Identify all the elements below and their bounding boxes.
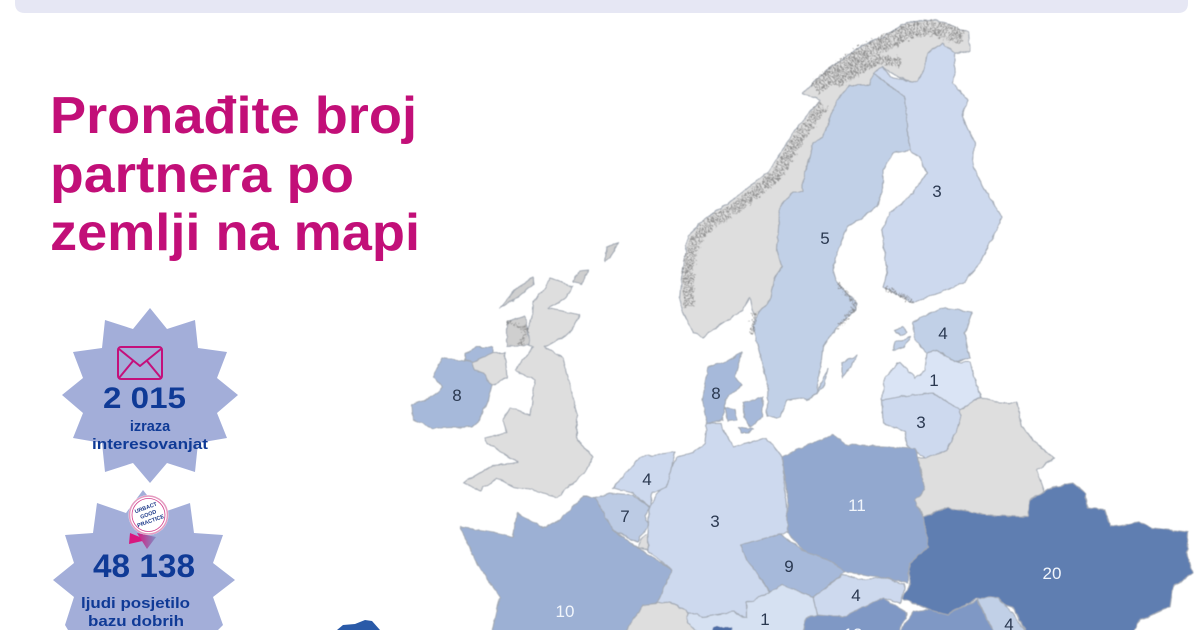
country: Belgium: [595, 493, 650, 542]
title: partnera po: [50, 146, 354, 204]
partner counts by country: 3: [710, 512, 720, 531]
icon: URBACT good practice seal: [128, 495, 168, 549]
partner counts by country: [452, 182, 1061, 630]
caption: ljudi posjetilo bazu dobrih: bazu dobrih: [88, 613, 184, 630]
islands: Baltic: [817, 327, 910, 393]
caption: izraza interesovanjat: [92, 419, 208, 453]
partner counts by country: 4: [642, 470, 652, 489]
number: 48 138: 48 138: [93, 548, 195, 584]
partner counts by country: 1: [929, 371, 939, 390]
country: Latvia: [882, 350, 980, 410]
country: Romania: [895, 600, 998, 630]
country: Sweden: [753, 73, 913, 417]
partner counts by country: 8: [711, 384, 721, 403]
country: Czechia: [740, 532, 845, 597]
partner counts by country: 9: [784, 557, 794, 576]
islands: Hebrides, Orkney and Shetland: [500, 242, 618, 346]
country: Austria: [688, 585, 817, 630]
caption: ljudi posjetilo bazu dobrih: [81, 595, 190, 630]
partner counts by country: 5: [820, 229, 830, 248]
country: Denmark: [702, 352, 763, 433]
partner counts by country: 20: [1043, 564, 1061, 583]
country: Netherlands: [613, 452, 675, 507]
partner counts by country: 4: [938, 324, 948, 343]
country: France: [460, 497, 672, 630]
country: United Kingdom: [463, 278, 593, 497]
map of Europe: [337, 20, 1193, 630]
country: Moldova: [977, 597, 1030, 630]
country: Ukraine: [902, 483, 1193, 630]
stat badge: expressions of interest: [62, 308, 238, 483]
country: Poland: [782, 435, 928, 583]
partner counts by country: 8: [452, 386, 462, 405]
partner counts by country: 10: [556, 602, 574, 621]
country: Norway: [680, 20, 970, 337]
icon: URBACT good practice seal: URBACT: [134, 501, 159, 515]
icon: envelope: [118, 347, 162, 379]
country: Hungary: [803, 598, 907, 630]
country: Italy fragment: [711, 627, 732, 630]
country: Ireland: [412, 347, 493, 428]
partner counts by country: 1: [760, 610, 770, 629]
caption: izraza interesovanjat: interesovanjat: [92, 437, 208, 453]
caption: ljudi posjetilo bazu dobrih: ljudi posjetilo: [81, 595, 190, 612]
coastline texture: fjords: [508, 28, 962, 345]
partner counts by country: 4: [851, 586, 861, 605]
country: Lithuania: [882, 393, 960, 458]
partner counts by country: 7: [620, 507, 630, 526]
country: Belarus: [915, 397, 1055, 517]
country: Switzerland: [620, 602, 705, 630]
icon: URBACT good practice seal: PRACTICE: [137, 514, 165, 529]
country: Luxembourg: [638, 533, 648, 550]
country: Germany: [647, 423, 788, 618]
country: Slovakia: [813, 575, 905, 617]
partner counts by country: 3: [916, 413, 926, 432]
stat badge: good practice visitors: [53, 490, 235, 630]
countries: [412, 20, 1193, 630]
mainland blob at lower edge: [337, 620, 380, 630]
title: [50, 87, 420, 262]
partner counts by country: 11: [848, 496, 866, 515]
caption: izraza interesovanjat: izraza: [130, 419, 171, 435]
icon: URBACT good practice seal: GOOD: [140, 509, 157, 521]
title: Pronađite broj: [50, 87, 417, 145]
country: Northern Ireland area: [472, 353, 507, 385]
top banner bar: [15, 0, 1188, 13]
number: 2 015: 2 015: [103, 382, 186, 415]
country: Estonia: [913, 308, 972, 362]
country: Finland: [873, 43, 1002, 303]
partner counts by country: 3: [932, 182, 942, 201]
title: zemlji na mapi: [50, 204, 420, 262]
